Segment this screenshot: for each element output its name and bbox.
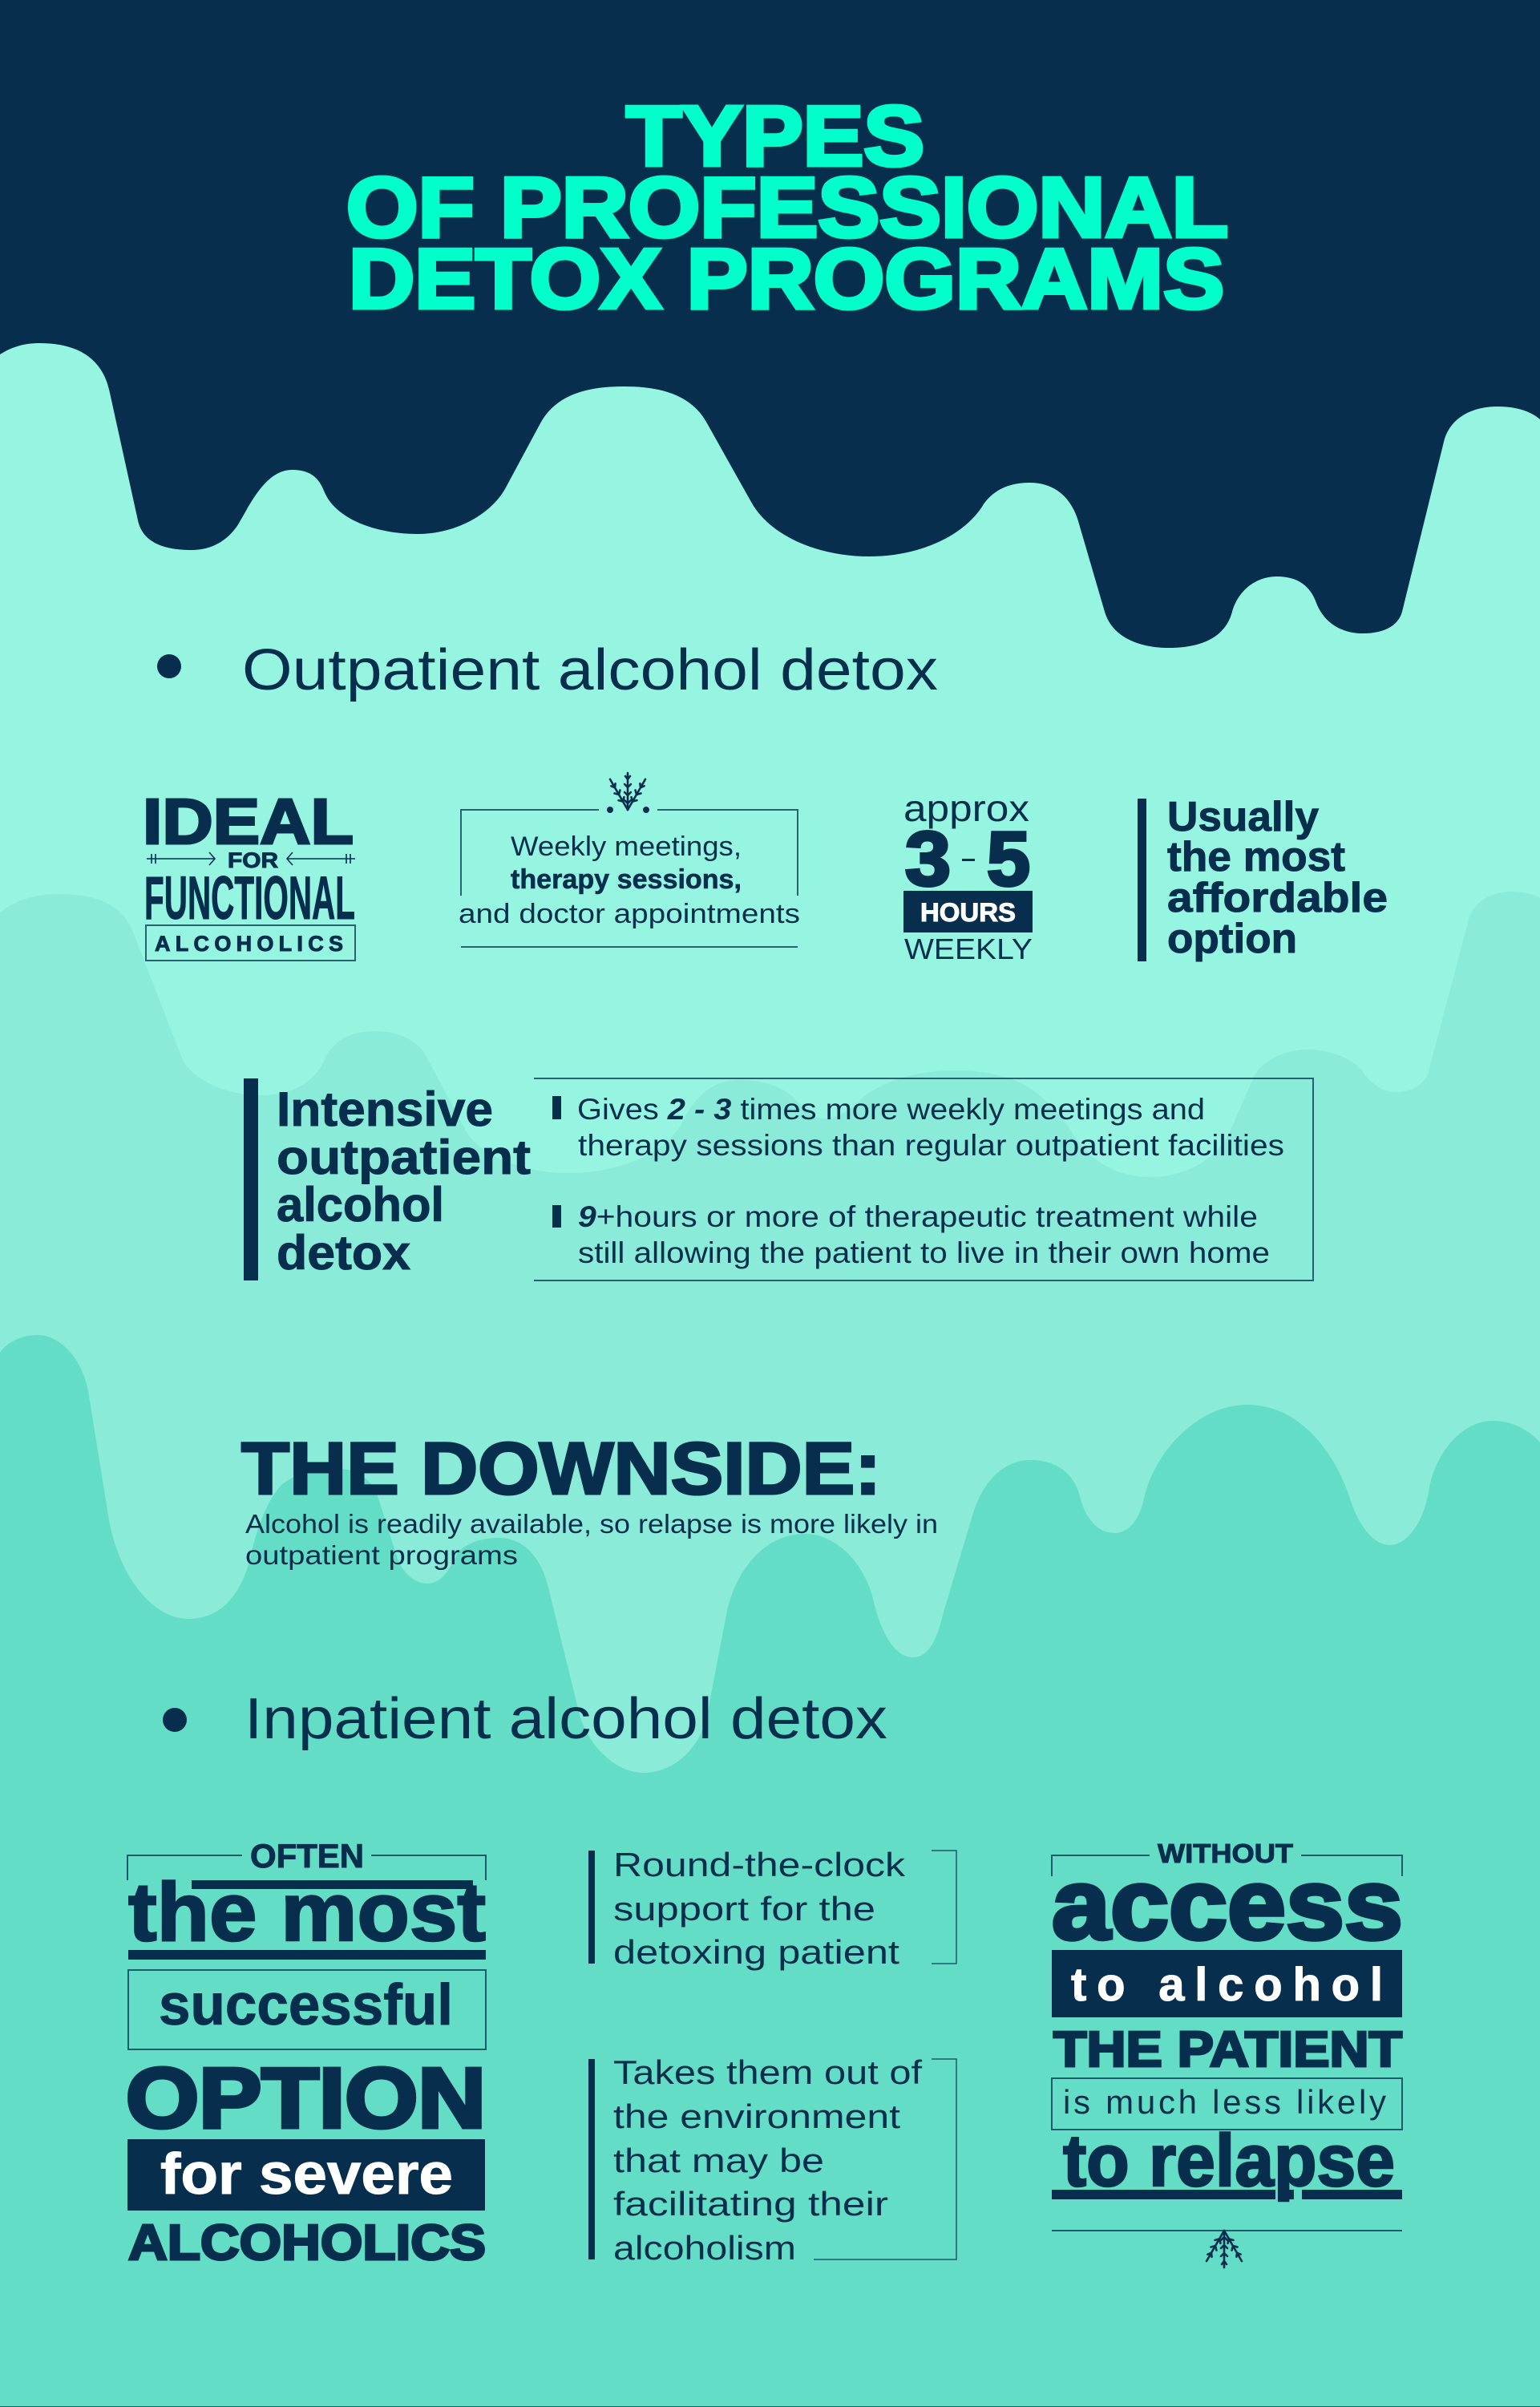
panel: ideal for functional alcoholics: IDEAL bbox=[143, 786, 354, 857]
icon: leaves bbox=[607, 773, 649, 813]
bullet text: 9+ hours: 9+hours or more of therapeutic treatment while bbox=[578, 1200, 1258, 1233]
panel: approx 3-5 hours weekly: 5 bbox=[987, 816, 1030, 902]
title: TYPES bbox=[626, 89, 924, 184]
icon: leaves inverted bbox=[1204, 2229, 1244, 2267]
panel: intensive outpatient alcohol detox: alcohol bbox=[277, 1178, 444, 1232]
bullet text: 2 - 3 times more: therapy sessions than regular outpatient facilities bbox=[578, 1129, 1284, 1162]
panel: often the most successful option: OPTION bbox=[126, 2051, 486, 2146]
panel: usually the most affordable option: Usually bbox=[1167, 794, 1319, 840]
panel: weekly meetings: therapy sessions, bbox=[511, 864, 742, 895]
panel: approx 3-5 hours weekly: WEEKLY bbox=[904, 932, 1033, 965]
panel: ideal for functional alcoholics: FOR bbox=[228, 848, 278, 872]
section heading: inpatient: Inpatient alcohol detox bbox=[245, 1687, 887, 1751]
panel: intensive outpatient alcohol detox bbox=[244, 1078, 1313, 1280]
bullet text: 9+ hours: still allowing the patient to live in their own home bbox=[578, 1236, 1270, 1269]
bullet text: 9+ hours bbox=[552, 1200, 1270, 1269]
panel: intensive outpatient alcohol detox: detox bbox=[277, 1226, 410, 1280]
panel: takes them out of the environment: alcoholism bbox=[613, 2229, 796, 2267]
arrows beside FOR bbox=[147, 852, 355, 865]
panel: often the most successful option: ALCOHOLICS bbox=[128, 2215, 486, 2271]
panel: takes them out of the environment: the environment bbox=[613, 2098, 900, 2135]
panel: approx 3-5 hours weekly: approx bbox=[903, 787, 1029, 829]
panel: approx 3-5 hours weekly bbox=[903, 787, 1033, 965]
panel: without access to alcohol bbox=[1052, 1839, 1403, 2267]
panel: without access to alcohol: THE PATIENT bbox=[1053, 2022, 1402, 2077]
panel: usually the most affordable option: affordable bbox=[1167, 875, 1388, 921]
panel: often the most successful option: OFTEN bbox=[250, 1837, 364, 1875]
panel: weekly meetings: Weekly meetings, bbox=[511, 831, 742, 862]
panel: often the most successful option: the most bbox=[128, 1866, 486, 1958]
panel: without access to alcohol: WITHOUT bbox=[1158, 1839, 1293, 1868]
panel: the downside bbox=[241, 1428, 938, 1570]
panel: without access to alcohol: to relapse bbox=[1063, 2120, 1395, 2202]
panel: round-the-clock support bbox=[588, 1846, 956, 1971]
panel: ideal for functional alcoholics: FUNCTIONAL bbox=[144, 864, 355, 932]
panel: usually the most affordable option bbox=[1138, 794, 1388, 962]
panel: often the most successful option: for severe bbox=[160, 2142, 453, 2207]
panel: round-the-clock support: detoxing patient bbox=[613, 1933, 899, 1971]
panel: usually the most affordable option: the most bbox=[1167, 834, 1345, 880]
panel: round-the-clock support: support for the bbox=[613, 1890, 875, 1928]
panel: the downside: THE DOWNSIDE: bbox=[241, 1428, 881, 1510]
panel: without access to alcohol: is much less likely bbox=[1063, 2083, 1386, 2121]
panel: without access to alcohol: to alcohol bbox=[1071, 1959, 1383, 2011]
panel: often the most successful option: successful bbox=[159, 1973, 453, 2037]
panel: takes them out of the environment: facilitating their bbox=[613, 2185, 888, 2223]
panel: approx 3-5 hours weekly: HOURS bbox=[920, 898, 1016, 927]
panel: usually the most affordable option: option bbox=[1167, 916, 1297, 962]
panel: without access to alcohol: access bbox=[1052, 1849, 1403, 1960]
panel: takes them out of the environment: Takes them out of bbox=[613, 2053, 922, 2091]
panel: often the most successful option bbox=[126, 1837, 486, 2271]
title bbox=[346, 89, 1228, 326]
panel: weekly meetings: and doctor appointments bbox=[459, 899, 800, 929]
panel: the downside: outpatient programs bbox=[245, 1540, 518, 1570]
panel: takes them out of the environment bbox=[588, 2053, 956, 2267]
panel: approx 3-5 hours weekly: 3 bbox=[905, 816, 951, 902]
panel: weekly meetings bbox=[459, 773, 800, 947]
panel: intensive outpatient alcohol detox: outpatient bbox=[277, 1131, 531, 1184]
title: OF PROFESSIONAL bbox=[346, 160, 1228, 255]
title: DETOX PROGRAMS bbox=[349, 232, 1224, 326]
panel: round-the-clock support: Round-the-clock bbox=[613, 1846, 906, 1883]
panel: takes them out of the environment: that may be bbox=[613, 2142, 824, 2179]
panel: the downside: Alcohol is readily available, so relapse is more likely in bbox=[245, 1509, 938, 1539]
section heading: outpatient: Outpatient alcohol detox bbox=[242, 638, 938, 702]
bullet text: 2 - 3 times more: Gives 2 - 3 times more weekly meetings and bbox=[577, 1093, 1205, 1126]
panel: ideal for functional alcoholics: ALCOHOLICS bbox=[155, 932, 343, 956]
panel: ideal for functional alcoholics bbox=[143, 786, 355, 961]
bullet text: 2 - 3 times more bbox=[552, 1093, 1284, 1162]
panel: intensive outpatient alcohol detox: Intensive bbox=[277, 1082, 493, 1136]
